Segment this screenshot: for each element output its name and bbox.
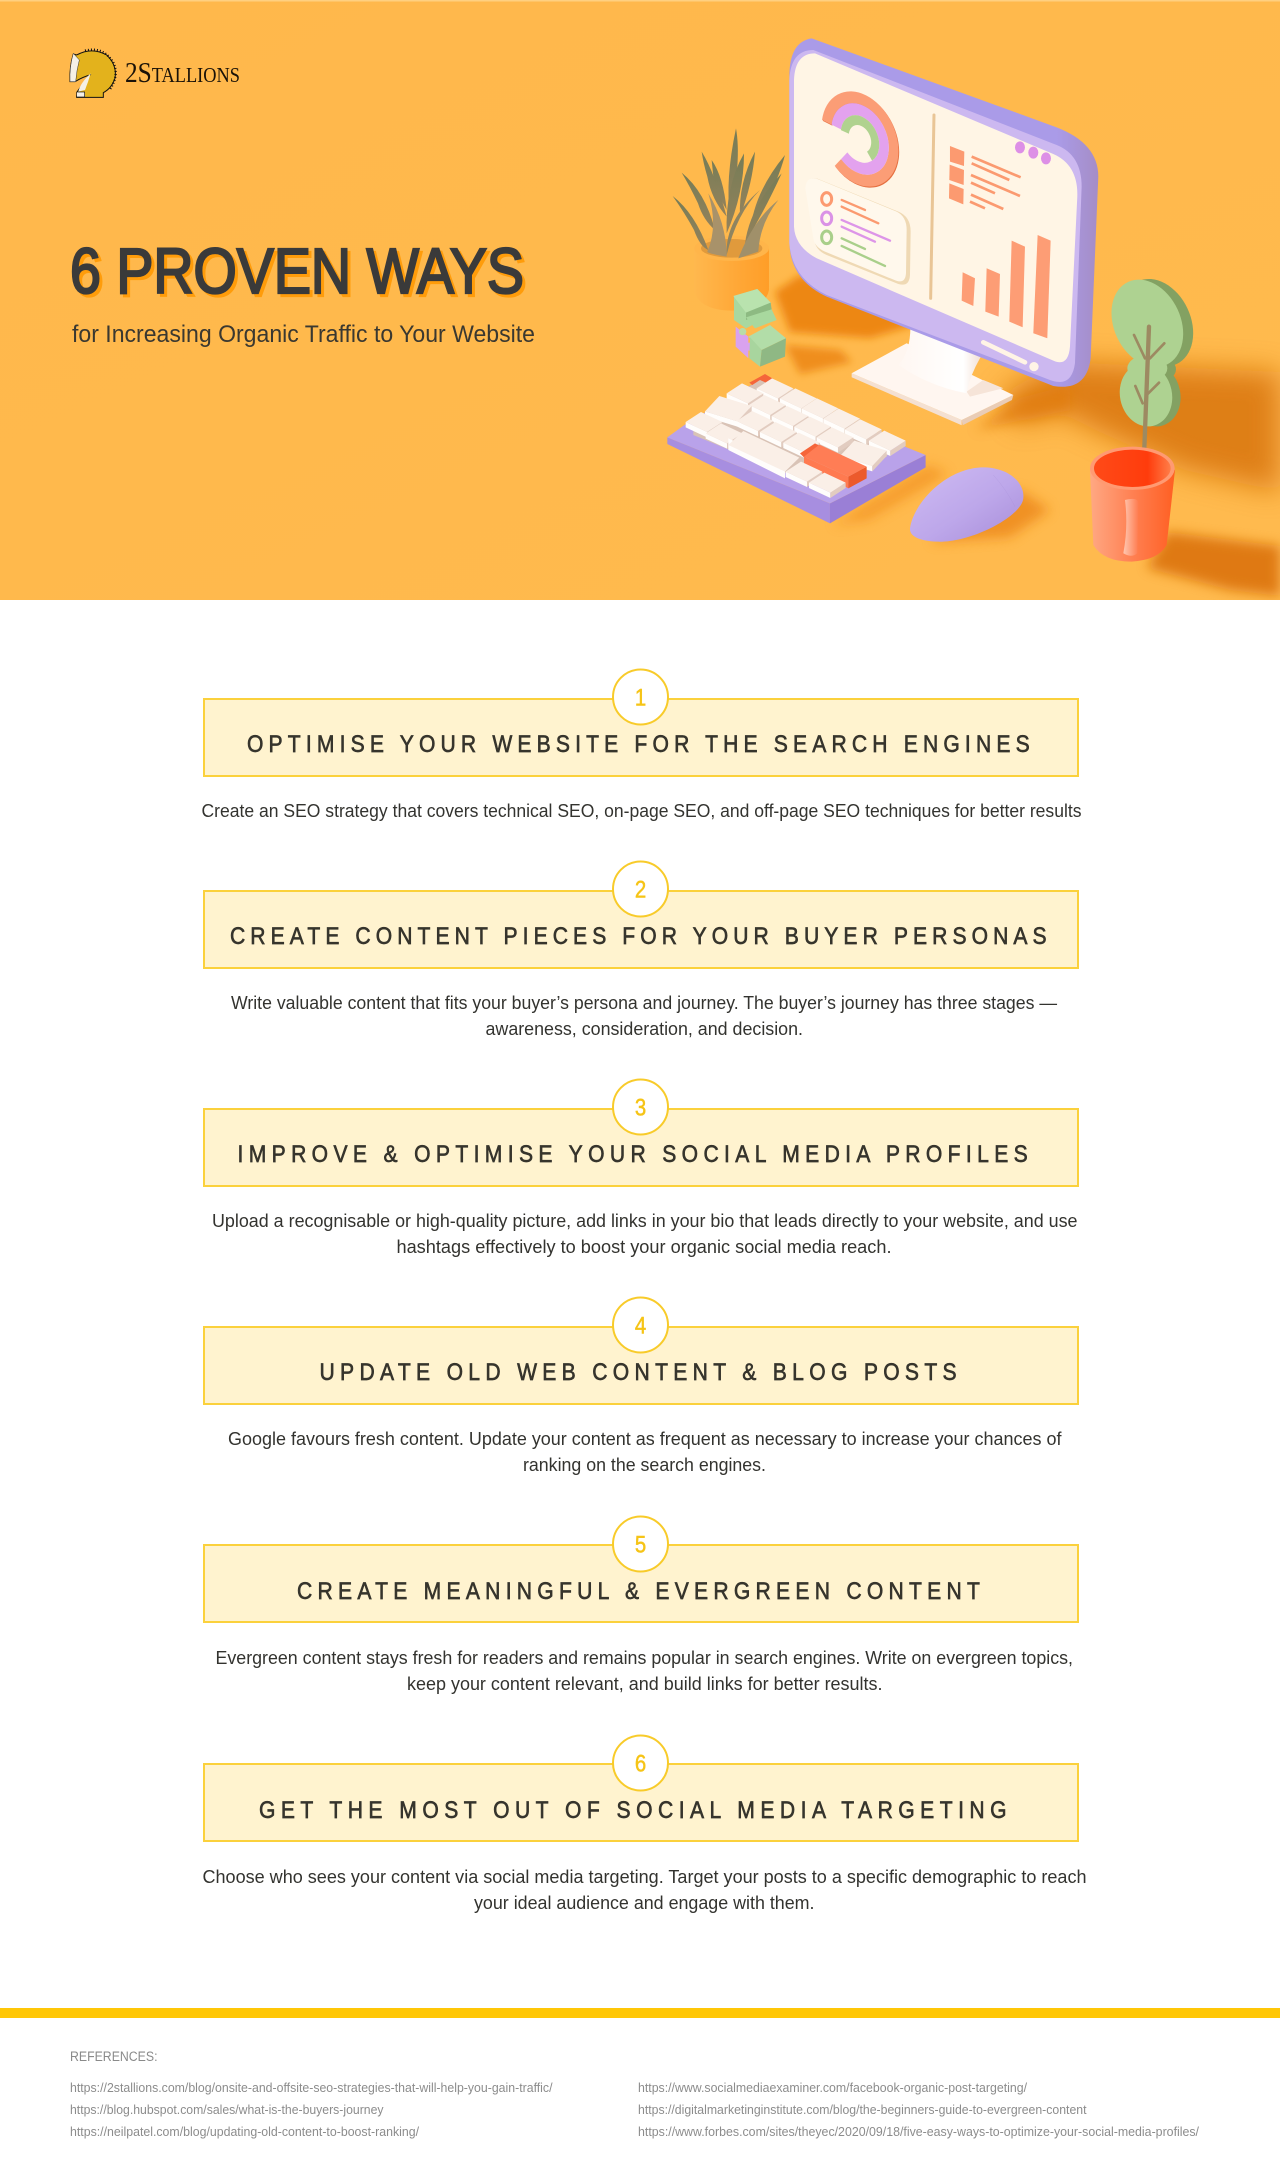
bar chart bbox=[962, 235, 1051, 338]
icon: tree bbox=[1098, 267, 1207, 448]
reference links left: https://2stallions.com/blog/onsite-and-offsite-seo-strategies-that-will-help-you-gain-traffic/ bbox=[70, 2081, 553, 2095]
description: Google favours fresh content. Update your content as frequent as necessary to increase your chances of bbox=[228, 1429, 1062, 1449]
panel: references bbox=[70, 2049, 1200, 2139]
subtitle: for Increasing Organic Traffic to Your Website bbox=[72, 321, 535, 348]
description: Evergreen content stays fresh for readers and remains popular in search engines. Write on evergreen topics, bbox=[216, 1648, 1073, 1668]
monitor frame bbox=[789, 38, 1098, 387]
step number bbox=[613, 1736, 668, 1790]
panel: hero banner bbox=[0, 0, 1280, 600]
reference links left: https://neilpatel.com/blog/updating-old-content-to-boost-ranking/ bbox=[70, 2125, 420, 2139]
key bed bbox=[693, 380, 893, 493]
icon: horse head logo bbox=[70, 50, 116, 97]
floor shadows bbox=[775, 275, 1280, 596]
panel: step 6 bbox=[202, 1736, 1086, 1913]
legend card bbox=[805, 178, 911, 285]
description: keep your content relevant, and build links for better results. bbox=[407, 1674, 882, 1694]
panel: step 1 bbox=[202, 670, 1082, 821]
icon: red cup bbox=[1090, 447, 1175, 562]
description: Choose who sees your content via social media targeting. Target your posts to a specific demographic to reach bbox=[202, 1867, 1086, 1887]
reference links right: https://www.forbes.com/sites/theyec/2020/09/18/five-easy-ways-to-optimize-your-social-media-profiles/ bbox=[638, 2125, 1200, 2139]
heading: CREATE MEANINGFUL & EVERGREEN CONTENT bbox=[297, 1578, 980, 1604]
icon: keyboard bbox=[667, 374, 926, 523]
step number bbox=[613, 862, 668, 916]
reference links right: https://www.socialmediaexaminer.com/facebook-organic-post-targeting/ bbox=[638, 2081, 1028, 2095]
description bbox=[216, 1648, 1073, 1694]
heading: UPDATE OLD WEB CONTENT & BLOG POSTS bbox=[320, 1359, 957, 1385]
step number: 4 bbox=[635, 1312, 646, 1339]
heading: GET THE MOST OUT OF SOCIAL MEDIA TARGETING bbox=[259, 1797, 1007, 1823]
three dots bbox=[1015, 141, 1051, 164]
text lines bbox=[970, 157, 1021, 209]
reference links right: https://digitalmarketinginstitute.com/blog/the-beginners-guide-to-evergreen-content bbox=[638, 2103, 1087, 2117]
step box bbox=[204, 1764, 1078, 1841]
heading: OPTIMISE YOUR WEBSITE FOR THE SEARCH ENGINES bbox=[247, 731, 1030, 757]
panel: step 4 bbox=[204, 1298, 1078, 1475]
reference links right bbox=[638, 2081, 1200, 2139]
description bbox=[212, 1211, 1078, 1257]
description: Write valuable content that fits your buyer’s persona and journey. The buyer’s journey has three stages — bbox=[231, 993, 1057, 1013]
panel: step 5 bbox=[204, 1516, 1078, 1694]
heading: IMPROVE & OPTIMISE YOUR SOCIAL MEDIA PROFILES bbox=[238, 1141, 1028, 1167]
reference links left bbox=[70, 2081, 553, 2139]
step number bbox=[613, 670, 668, 724]
step number: 1 bbox=[635, 684, 646, 711]
description: Create an SEO strategy that covers technical SEO, on-page SEO, and off-page SEO techniques for better results bbox=[202, 801, 1082, 821]
step number: 2 bbox=[635, 876, 646, 903]
tree foliage bbox=[1098, 267, 1207, 431]
icon: desktop monitor bbox=[789, 38, 1098, 425]
reference links left: https://blog.hubspot.com/sales/what-is-the-buyers-journey bbox=[70, 2103, 384, 2117]
panel: step 3 bbox=[204, 1080, 1078, 1257]
description bbox=[231, 993, 1057, 1039]
title: 6 PROVEN WAYS bbox=[70, 235, 524, 307]
step number: 5 bbox=[635, 1531, 646, 1558]
step box bbox=[204, 699, 1078, 776]
description: your ideal audience and engage with them. bbox=[474, 1893, 814, 1913]
icon: potted plant bbox=[673, 128, 785, 311]
heading: CREATE CONTENT PIECES FOR YOUR BUYER PERSONAS bbox=[230, 923, 1047, 949]
step number bbox=[613, 1080, 668, 1134]
description: ranking on the search engines. bbox=[523, 1455, 766, 1475]
salmon blocks bbox=[949, 146, 964, 204]
monitor screen bbox=[794, 53, 1077, 362]
step number bbox=[613, 1298, 668, 1352]
screen divider bbox=[931, 115, 934, 298]
step number: 6 bbox=[635, 1750, 646, 1777]
step box bbox=[204, 1545, 1078, 1622]
icon: mouse bbox=[910, 467, 1023, 542]
tree trunk bbox=[1134, 327, 1164, 448]
panel: step 2 bbox=[204, 862, 1078, 1039]
step number: 3 bbox=[635, 1094, 646, 1121]
keys bbox=[686, 378, 906, 498]
footer divider bar bbox=[0, 2008, 1280, 2018]
description: hashtags effectively to boost your organic social media reach. bbox=[396, 1237, 892, 1257]
bottom pill and dot bbox=[983, 342, 1039, 371]
description bbox=[202, 1867, 1086, 1913]
icon: puzzle cubes bbox=[733, 289, 786, 367]
description bbox=[228, 1429, 1062, 1475]
description: Upload a recognisable or high-quality picture, add links in your bio that leads directly to your website, and use bbox=[212, 1211, 1078, 1231]
step box bbox=[204, 1109, 1078, 1186]
logo: 2Stallions bbox=[70, 50, 240, 97]
monitor stand bbox=[852, 317, 1013, 425]
step number bbox=[613, 1516, 668, 1572]
description: awareness, consideration, and decision. bbox=[486, 1019, 803, 1039]
logo wordmark: 2STALLIONS bbox=[125, 57, 240, 89]
donut chart bbox=[821, 81, 900, 198]
step box bbox=[204, 891, 1078, 968]
step box bbox=[204, 1327, 1078, 1404]
references heading: REFERENCES: bbox=[70, 2049, 158, 2064]
